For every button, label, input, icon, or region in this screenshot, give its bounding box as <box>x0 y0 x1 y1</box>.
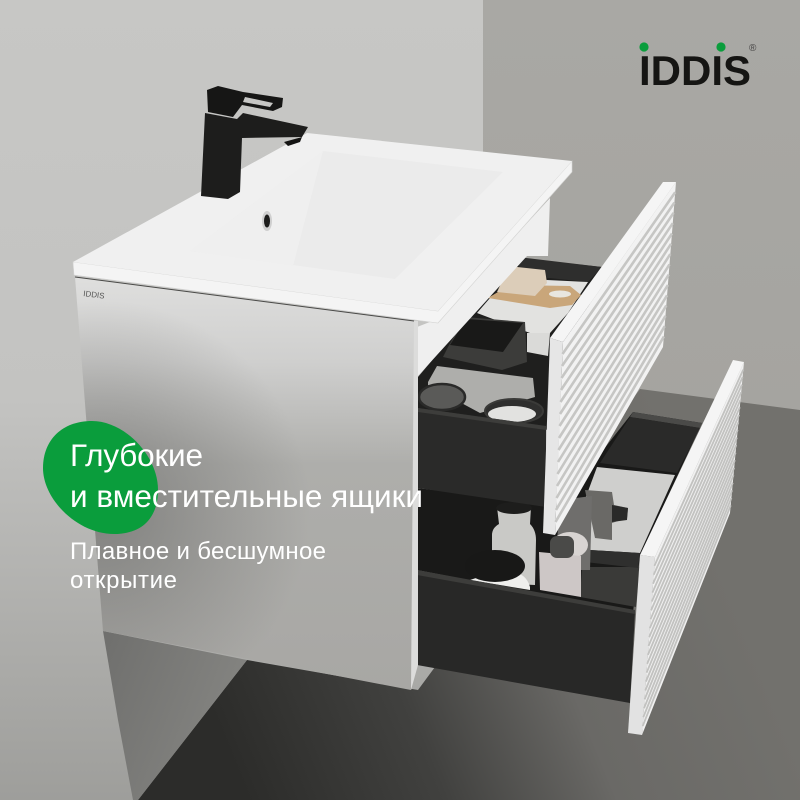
faucet aerator <box>284 137 302 146</box>
frame band under counter <box>417 198 550 377</box>
counter front edge <box>73 161 572 323</box>
fluted face <box>555 182 676 535</box>
wooden brush <box>488 267 581 308</box>
black organiser box <box>443 317 527 370</box>
end strip <box>628 555 655 735</box>
small panel logo: IDDIS <box>83 289 105 301</box>
top edge <box>550 182 676 342</box>
upper drawer back rim <box>518 257 602 282</box>
glass bowl <box>419 384 465 410</box>
logo dots <box>639 42 649 52</box>
lower towel fold <box>527 333 550 356</box>
basin <box>190 151 503 279</box>
upper drawer front <box>543 182 676 535</box>
countertop <box>73 133 572 323</box>
faucet <box>201 86 308 199</box>
lower drawer <box>417 412 702 612</box>
panel seam <box>75 277 414 321</box>
faucet body <box>201 113 308 199</box>
faucet lever <box>207 86 283 117</box>
cabinet side panel <box>75 277 418 690</box>
lower drawer floor <box>580 567 640 607</box>
basin side facet <box>190 151 323 266</box>
glass with white base <box>552 496 592 570</box>
subtitle: открытие <box>70 567 177 594</box>
cabinet shadow on wall <box>103 631 247 800</box>
upper drawer box side <box>418 408 546 507</box>
background: right wall <box>483 0 800 420</box>
lower drawer back rim <box>630 412 702 428</box>
logo wordmark: IDDIS <box>639 47 751 94</box>
lower drawer front <box>628 360 744 735</box>
counter top surface <box>73 133 572 311</box>
jar with black lid <box>465 550 530 590</box>
drain overflow <box>262 211 272 231</box>
towel in lower drawer <box>570 467 675 553</box>
white bottle <box>492 502 536 585</box>
flutes <box>556 192 675 522</box>
fluted face <box>642 362 744 735</box>
glass bowl with white pad <box>485 399 543 423</box>
lower drawer box side <box>417 570 635 703</box>
front strip <box>411 321 418 690</box>
upper towel <box>477 280 588 333</box>
flutes <box>643 370 743 726</box>
background: left wall <box>0 0 486 800</box>
upper drawer interior <box>418 257 602 430</box>
towel lower fold <box>585 550 640 568</box>
lower drawer interior <box>417 412 702 612</box>
lower drawer back wall <box>600 417 700 473</box>
headline: Глубокие <box>70 437 203 473</box>
subtitle: Плавное и бесшумное <box>70 538 326 565</box>
registered mark: ® <box>749 43 757 54</box>
top edge <box>640 360 744 557</box>
rolled towel <box>428 366 535 413</box>
green blob <box>43 421 158 534</box>
headline: и вместительные ящики <box>70 478 423 514</box>
background: floor <box>138 389 800 800</box>
small glass bottle with cap <box>539 536 581 597</box>
end strip <box>543 338 563 535</box>
brand logo <box>639 42 757 94</box>
dark bottle and clamp <box>585 490 628 540</box>
